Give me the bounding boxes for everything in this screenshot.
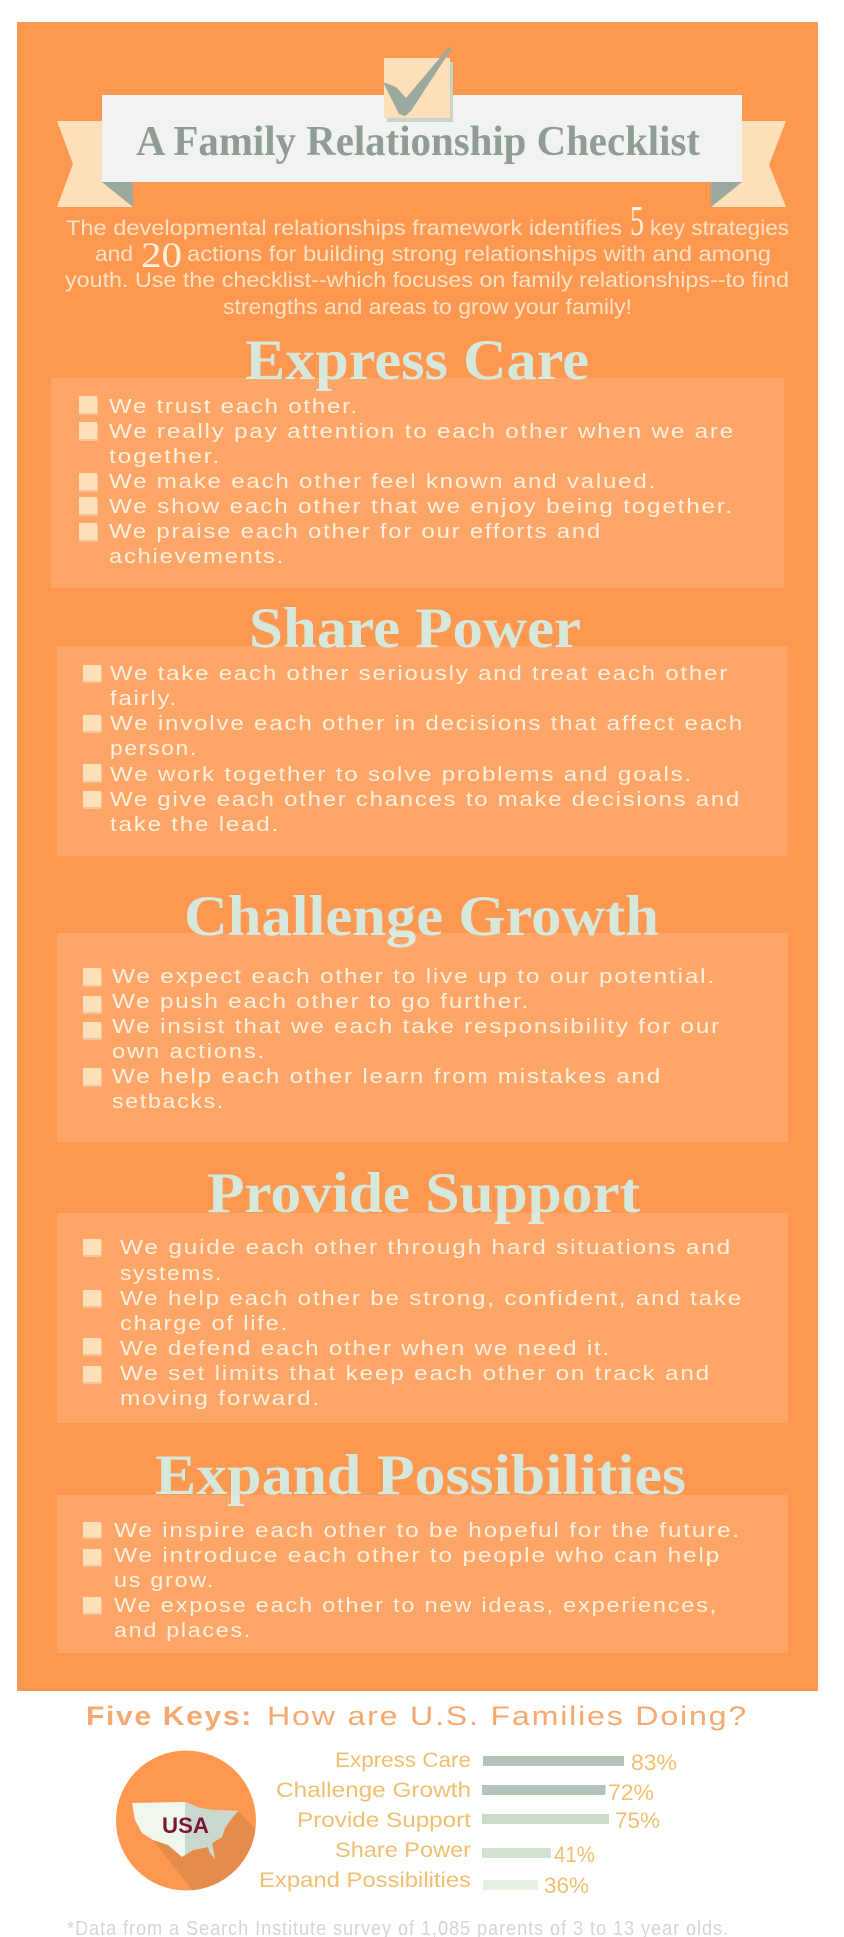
section: Provide Support	[57, 1162, 788, 1423]
row: Express Care 83%: 83%	[631, 1750, 677, 1775]
heading: Share Power: Share Power	[249, 597, 581, 660]
panel: Share Power	[57, 646, 787, 856]
title ribbon banner	[57, 95, 786, 207]
checklist: Provide Support: We defend each other when we need it.	[120, 1338, 611, 1360]
checklist: Share Power: person.	[110, 738, 198, 760]
checklist: Express Care: We praise each other for our efforts and	[109, 521, 602, 543]
checklist: Provide Support: We help each other be strong, confident, and take	[120, 1288, 743, 1310]
ribbon left tail	[57, 121, 133, 207]
ribbon left fold	[102, 182, 133, 207]
row: Expand Possibilities 36%: 36%	[544, 1873, 589, 1898]
row: Provide Support 75%	[297, 1808, 660, 1833]
heading: Expand Possibilities: Expand Possibilities	[155, 1444, 686, 1507]
row: Share Power 41%	[335, 1839, 595, 1867]
section: Share Power	[57, 597, 787, 856]
checklist: Provide Support: moving forward.	[120, 1388, 321, 1410]
row: Challenge Growth 72%: Challenge Growth	[276, 1779, 471, 1802]
ribbon right tail	[711, 121, 786, 207]
row: Express Care 83%	[335, 1749, 677, 1775]
heading: Challenge Growth: Challenge Growth	[184, 885, 659, 948]
checklist: Share Power: We work together to solve problems and goals.	[110, 764, 693, 786]
checklist: Provide Support: We guide each other through hard situations and	[120, 1237, 732, 1259]
title: A Family Relationship Checklist	[136, 119, 700, 165]
checklist: Express Care	[79, 396, 735, 568]
checklist: Challenge Growth: We insist that we each take responsibility for our	[112, 1016, 721, 1038]
checklist: Challenge Growth: We help each other learn from mistakes and	[112, 1066, 662, 1088]
section: Challenge Growth	[57, 885, 788, 1142]
intro paragraph: 20	[141, 235, 182, 275]
row: Expand Possibilities 36%: Expand Possibilities	[259, 1869, 471, 1892]
intro paragraph: 5	[630, 199, 644, 245]
panel: Challenge Growth	[57, 933, 788, 1142]
icon: checkmark box	[383, 47, 453, 122]
section: Expand Possibilities	[57, 1444, 788, 1653]
intro paragraph: and	[95, 243, 133, 266]
heading: Provide Support: Provide Support	[207, 1162, 640, 1225]
checklist: Challenge Growth: setbacks.	[112, 1091, 225, 1113]
label: USA: USA	[162, 1813, 209, 1838]
checklist: Expand Possibilities: We introduce each other to people who can help	[114, 1545, 721, 1567]
row: Express Care 83%: Express Care	[335, 1749, 471, 1772]
checklist: Expand Possibilities	[83, 1520, 741, 1642]
intro paragraph: youth. Use the checklist--which focuses on family relationships--to find	[65, 269, 789, 292]
panel: Provide Support	[57, 1213, 788, 1423]
heading: Express Care: Express Care	[245, 329, 589, 392]
row: Challenge Growth 72%	[276, 1779, 654, 1805]
heading: Five Keys: How are U.S. Families Doing?	[267, 1701, 748, 1731]
checklist: Expand Possibilities: us grow.	[114, 1570, 215, 1592]
intro paragraph: key strategies	[650, 217, 789, 240]
row: Challenge Growth 72%: 72%	[608, 1780, 654, 1805]
checklist: Express Care: We really pay attention to each other when we are	[109, 421, 735, 443]
checklist: Express Care: We trust each other.	[109, 396, 359, 418]
heading: Five Keys	[86, 1701, 748, 1731]
checklist: Express Care: achievements.	[109, 546, 285, 568]
bar chart: five keys	[259, 1749, 677, 1898]
icon: USA map badge	[116, 1750, 262, 1895]
panel: Expand Possibilities	[57, 1495, 788, 1653]
checklist: Share Power: We give each other chances to make decisions and	[110, 789, 741, 811]
intro paragraph: The developmental relationships framework identifies	[66, 217, 622, 240]
row: Share Power 41%: Share Power	[335, 1839, 471, 1862]
checklist: Challenge Growth: own actions.	[112, 1041, 266, 1063]
checklist: Provide Support: systems.	[120, 1263, 223, 1285]
checklist: Express Care: We show each other that we enjoy being together.	[109, 496, 734, 518]
checklist: Share Power: fairly.	[110, 688, 178, 710]
checklist: Challenge Growth: We push each other to go further.	[112, 991, 530, 1013]
row: Share Power 41%: 41%	[554, 1842, 595, 1867]
row: Provide Support 75%: 75%	[615, 1808, 660, 1833]
row: Expand Possibilities 36%	[259, 1869, 589, 1898]
intro paragraph: strengths and areas to grow your family!	[223, 296, 632, 319]
checklist: Express Care: We make each other feel known and valued.	[109, 471, 657, 493]
checklist: Share Power	[83, 663, 744, 836]
checklist: Challenge Growth	[83, 966, 721, 1113]
checklist: Expand Possibilities: We expose each other to new ideas, experiences,	[114, 1595, 718, 1617]
checklist: Express Care: together.	[109, 446, 221, 468]
section: Express Care	[51, 329, 784, 588]
checklist: Share Power: take the lead.	[110, 814, 280, 836]
ribbon main band	[102, 95, 742, 182]
heading: Five Keys: Five Keys:	[86, 1701, 253, 1731]
ribbon right fold	[711, 182, 742, 207]
checklist: Provide Support: charge of life.	[120, 1313, 289, 1335]
checklist: Expand Possibilities: We inspire each other to be hopeful for the future.	[114, 1520, 741, 1542]
checklist: Challenge Growth: We expect each other to live up to our potential.	[112, 966, 716, 988]
checklist: Provide Support: We set limits that keep each other on track and	[120, 1363, 711, 1385]
checklist: Provide Support	[83, 1237, 743, 1410]
intro paragraph: actions for building strong relationships with and among	[187, 243, 771, 266]
checklist: Share Power: We take each other seriously and treat each other	[110, 663, 729, 685]
row: Provide Support 75%: Provide Support	[297, 1809, 471, 1832]
checklist: Share Power: We involve each other in decisions that affect each	[110, 713, 744, 735]
checklist: Expand Possibilities: and places.	[114, 1620, 252, 1642]
panel: Express Care	[51, 378, 784, 588]
intro paragraph	[65, 199, 789, 319]
